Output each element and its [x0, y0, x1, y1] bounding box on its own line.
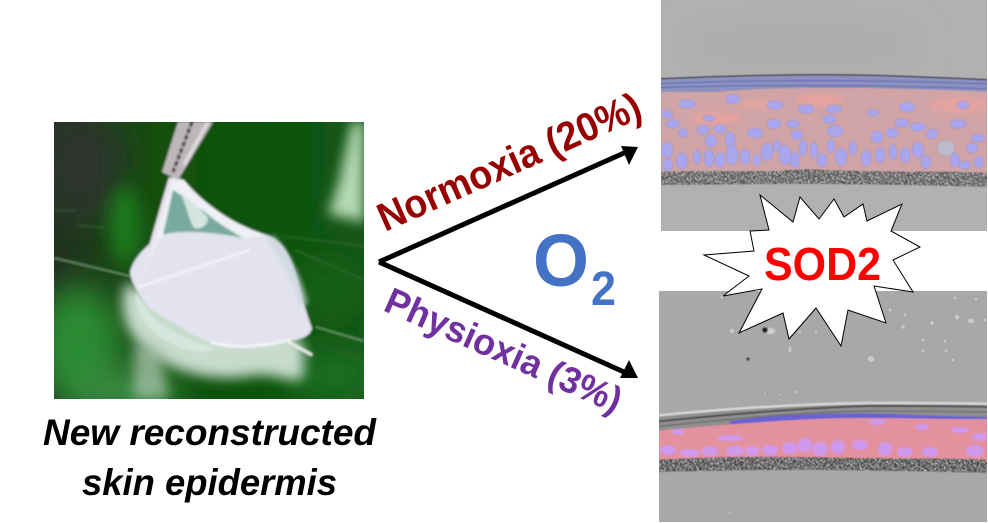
disc body	[130, 232, 312, 347]
tweezers	[162, 122, 213, 180]
micrograph: normoxia epidermis	[655, 0, 988, 235]
arrow: physioxia	[379, 262, 638, 378]
caption: new reconstructed skin epidermis: New reconstructed	[43, 412, 377, 453]
porous membrane	[655, 169, 988, 187]
living epidermis	[653, 418, 988, 460]
nuclei	[661, 94, 985, 171]
label: SOD2: SOD2	[764, 238, 881, 290]
caption: new reconstructed skin epidermis: skin epidermis	[82, 462, 337, 503]
reflection under disc	[123, 282, 304, 380]
label: physioxia 3%: Physioxia (3%)	[379, 280, 628, 421]
label: O2: O	[533, 219, 589, 302]
label: O2: 2	[591, 263, 616, 316]
photo: reconstructed skin epidermis held by tweezers	[54, 122, 364, 399]
caption: new reconstructed skin epidermis	[43, 412, 377, 503]
stratum corneum	[659, 404, 987, 430]
starburst callout: SOD2	[704, 195, 920, 346]
stratum corneum	[655, 75, 988, 92]
lifted film	[154, 176, 269, 244]
arrow: normoxia	[379, 146, 638, 262]
nuclei	[660, 419, 988, 457]
porous membrane	[653, 457, 988, 473]
droplets	[720, 295, 987, 396]
micrograph: physioxia epidermis	[653, 285, 988, 523]
living epidermis	[655, 88, 988, 173]
label: O2	[533, 219, 616, 316]
label: normoxia 20%: Normoxia (20%)	[371, 85, 648, 240]
